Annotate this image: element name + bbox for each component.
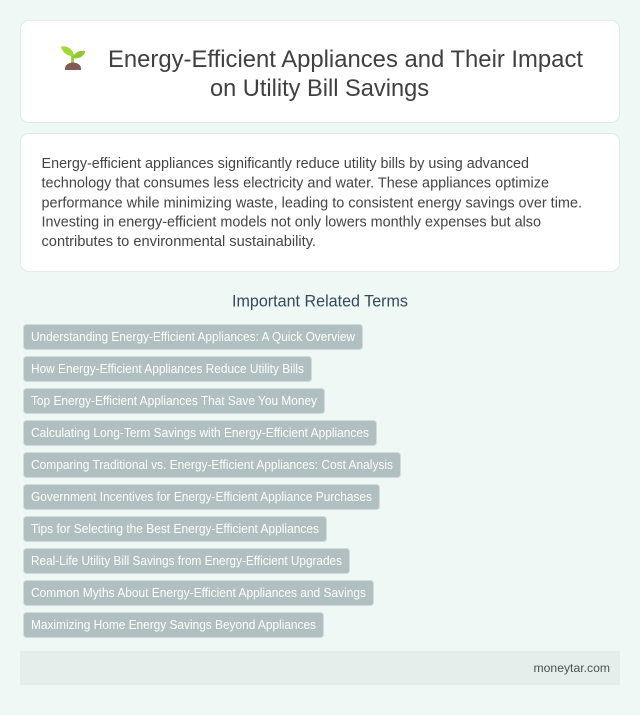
panel: header card — [20, 20, 620, 122]
term tag 10: Maximizing Home Energy Savings Beyond Appliances — [31, 618, 316, 632]
term tag 6 — [24, 484, 380, 510]
term tag 5 — [24, 452, 400, 478]
icon: seedling — [61, 46, 85, 70]
term tag 4: Calculating Long-Term Savings with Energy-Efficient Appliances — [31, 426, 369, 440]
title: Energy-Efficient Appliances and Their Impact — [108, 46, 583, 73]
term tag 8: Real-Life Utility Bill Savings from Energy-Efficient Upgrades — [31, 554, 342, 568]
term tag 6: Government Incentives for Energy-Efficient Appliance Purchases — [31, 490, 372, 504]
heading: important related terms: Important Related Terms — [232, 292, 408, 310]
term tag 3: Top Energy-Efficient Appliances That Save You Money — [31, 394, 318, 408]
text block: description — [42, 156, 582, 250]
term tag 2: How Energy-Efficient Appliances Reduce Utility Bills — [31, 362, 304, 376]
term tag 3 — [24, 388, 324, 414]
term tag 1: Understanding Energy-Efficient Appliances: A Quick Overview — [31, 330, 356, 344]
footer source text: moneytar.com — [534, 661, 610, 675]
term tag 5: Comparing Traditional vs. Energy-Efficient Appliances: Cost Analysis — [31, 458, 393, 472]
term tag 2 — [24, 356, 312, 382]
text block: description: technology that consumes less electricity and water. These appliances optimize — [42, 176, 549, 192]
text block: description: contributes to environmental sustainability. — [42, 234, 316, 250]
term tag 7 — [24, 516, 326, 542]
text block: description: performance while minimizing waste, leading to consistent energy savings over time. — [42, 196, 582, 212]
text block: description: Energy-efficient appliances significantly reduce utility bills by using advanced — [42, 156, 529, 172]
title: on Utility Bill Savings — [210, 75, 429, 102]
panel: description card — [20, 134, 620, 272]
term tag 4 — [24, 420, 376, 446]
footer bar — [20, 651, 620, 685]
text block: description: Investing in energy-efficient models not only lowers monthly expenses but also — [42, 214, 541, 230]
term tag 8 — [24, 548, 350, 574]
term tag 9 — [24, 580, 374, 606]
title — [108, 46, 583, 102]
term tag 10 — [24, 612, 324, 638]
term tag 1 — [24, 324, 362, 350]
term tag 7: Tips for Selecting the Best Energy-Efficient Appliances — [31, 522, 319, 536]
list of related terms — [24, 324, 400, 638]
term tag 9: Common Myths About Energy-Efficient Appliances and Savings — [31, 586, 366, 600]
